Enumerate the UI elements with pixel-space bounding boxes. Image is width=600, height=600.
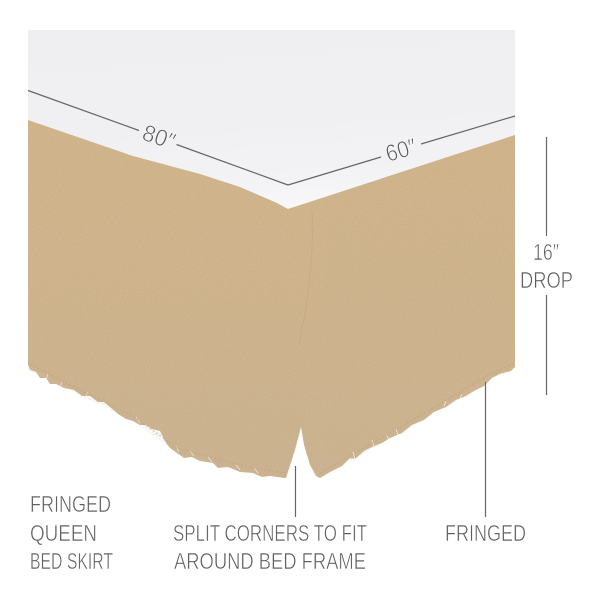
callout: split corners: AROUND BED FRAME xyxy=(174,548,366,574)
title: fringed queen bed skirt xyxy=(30,491,113,574)
panel: right skirt side with fringed edge xyxy=(288,135,515,478)
callout: fringed edge: FRINGED xyxy=(445,520,526,546)
fringe threads xyxy=(353,394,462,460)
dimension: 16 inch drop: DROP xyxy=(520,267,573,293)
fringe threads xyxy=(46,374,258,473)
title: fringed queen bed skirt: BED SKIRT xyxy=(30,548,113,574)
corner seam stitching xyxy=(299,212,312,345)
callout: split corners xyxy=(173,466,367,574)
dimension: 80 inch length: 80″ xyxy=(139,119,179,155)
dimension: 16 inch drop xyxy=(520,137,573,395)
title: fringed queen bed skirt: QUEEN xyxy=(30,520,97,546)
fringe band xyxy=(30,364,286,473)
callout: split corners: SPLIT CORNERS TO FIT xyxy=(173,520,367,546)
dimension: 60 inch width xyxy=(288,116,515,185)
dimension: 80 inch length xyxy=(28,90,288,185)
white sheet on top of bed xyxy=(28,30,515,209)
fringe band xyxy=(320,363,515,473)
dimension: 16 inch drop: 16″ xyxy=(533,239,559,265)
panel: left skirt side with fringed edge xyxy=(28,120,330,478)
dimension: 60 inch width: 60″ xyxy=(383,133,419,167)
title: fringed queen bed skirt: FRINGED xyxy=(30,491,111,517)
